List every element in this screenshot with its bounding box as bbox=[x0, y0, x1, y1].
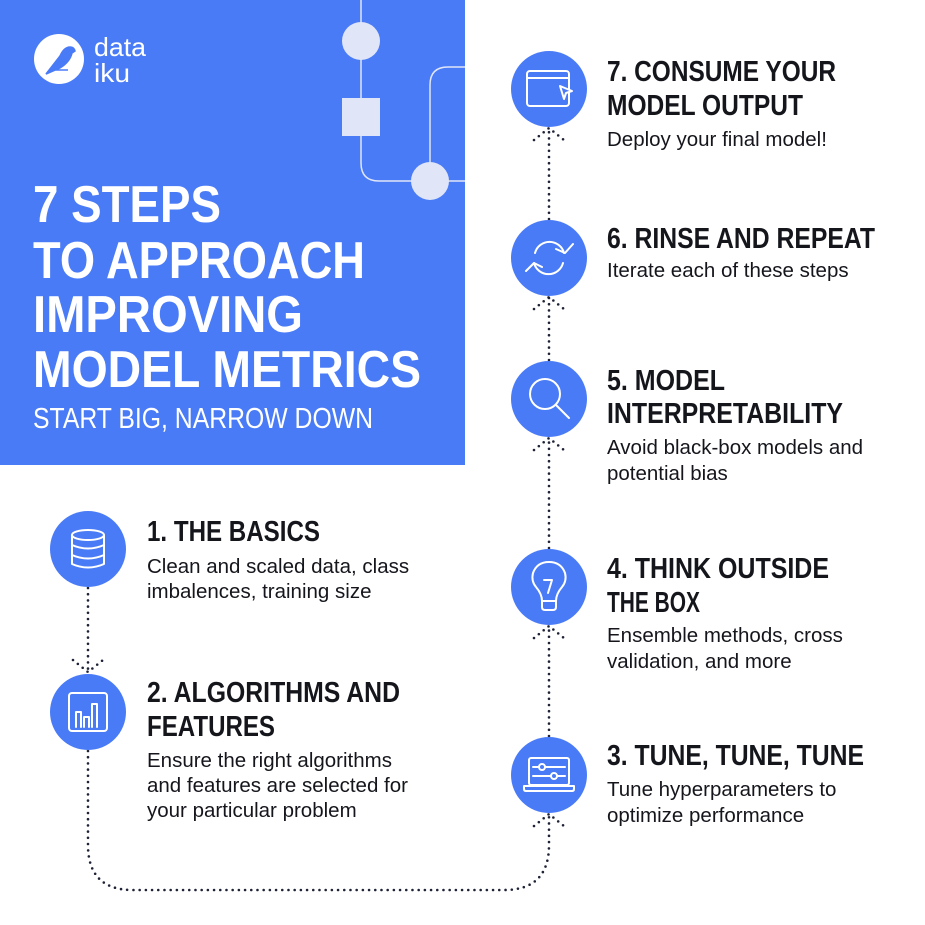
logo: iku bbox=[94, 58, 130, 88]
icon: window cursor bbox=[511, 51, 587, 127]
step 1: Clean and scaled data, class bbox=[147, 555, 409, 578]
step 4 bbox=[511, 549, 843, 673]
step 3: Tune hyperparameters to bbox=[607, 778, 836, 801]
step 2: FEATURES bbox=[147, 711, 275, 743]
step 6: Iterate each of these steps bbox=[607, 259, 849, 282]
step 4: validation, and more bbox=[607, 650, 792, 673]
icon: refresh bbox=[511, 220, 587, 296]
step 4: 4. THINK OUTSIDE bbox=[607, 553, 829, 585]
step 5: potential bias bbox=[607, 462, 728, 485]
step 1: imbalences, training size bbox=[147, 580, 371, 603]
title: 7 STEPS bbox=[33, 176, 221, 234]
step 2: your particular problem bbox=[147, 799, 357, 822]
step 2: 2. ALGORITHMS AND bbox=[147, 677, 400, 709]
icon: lightbulb bbox=[511, 549, 587, 625]
step 1: 1. THE BASICS bbox=[147, 516, 320, 548]
title: MODEL METRICS bbox=[33, 341, 421, 399]
connector: dotted path bbox=[73, 128, 564, 890]
subtitle: START BIG, NARROW DOWN bbox=[33, 403, 373, 435]
decoration: flow diagram bbox=[342, 0, 465, 200]
step 2 bbox=[50, 674, 408, 822]
step 3: 3. TUNE, TUNE, TUNE bbox=[607, 740, 864, 772]
step 4: Ensemble methods, cross bbox=[607, 624, 843, 647]
title: IMPROVING bbox=[33, 286, 303, 344]
step 5: Avoid black-box models and bbox=[607, 436, 863, 459]
step 6: 6. RINSE AND REPEAT bbox=[607, 223, 875, 255]
step 5 bbox=[511, 361, 863, 485]
icon: bar chart bbox=[50, 674, 126, 750]
step 1 bbox=[50, 511, 409, 603]
step 6 bbox=[511, 220, 875, 296]
title: TO APPROACH bbox=[33, 232, 365, 290]
step 7: MODEL OUTPUT bbox=[607, 90, 803, 122]
step 5: 5. MODEL bbox=[607, 365, 725, 397]
icon: laptop sliders bbox=[511, 737, 587, 813]
step 7: Deploy your final model! bbox=[607, 128, 827, 151]
logo bbox=[34, 32, 147, 88]
logo: data bbox=[94, 32, 147, 62]
step 7: 7. CONSUME YOUR bbox=[607, 56, 836, 88]
icon: magnifier bbox=[511, 361, 587, 437]
step 4: THE BOX bbox=[607, 587, 700, 619]
step 2: and features are selected for bbox=[147, 774, 408, 797]
header panel bbox=[0, 0, 465, 465]
step 5: INTERPRETABILITY bbox=[607, 398, 843, 430]
step 3 bbox=[511, 737, 864, 827]
step 3: optimize performance bbox=[607, 804, 804, 827]
step 7 bbox=[511, 51, 836, 151]
title bbox=[33, 176, 421, 399]
icon: database bbox=[50, 511, 126, 587]
step 2: Ensure the right algorithms bbox=[147, 749, 392, 772]
